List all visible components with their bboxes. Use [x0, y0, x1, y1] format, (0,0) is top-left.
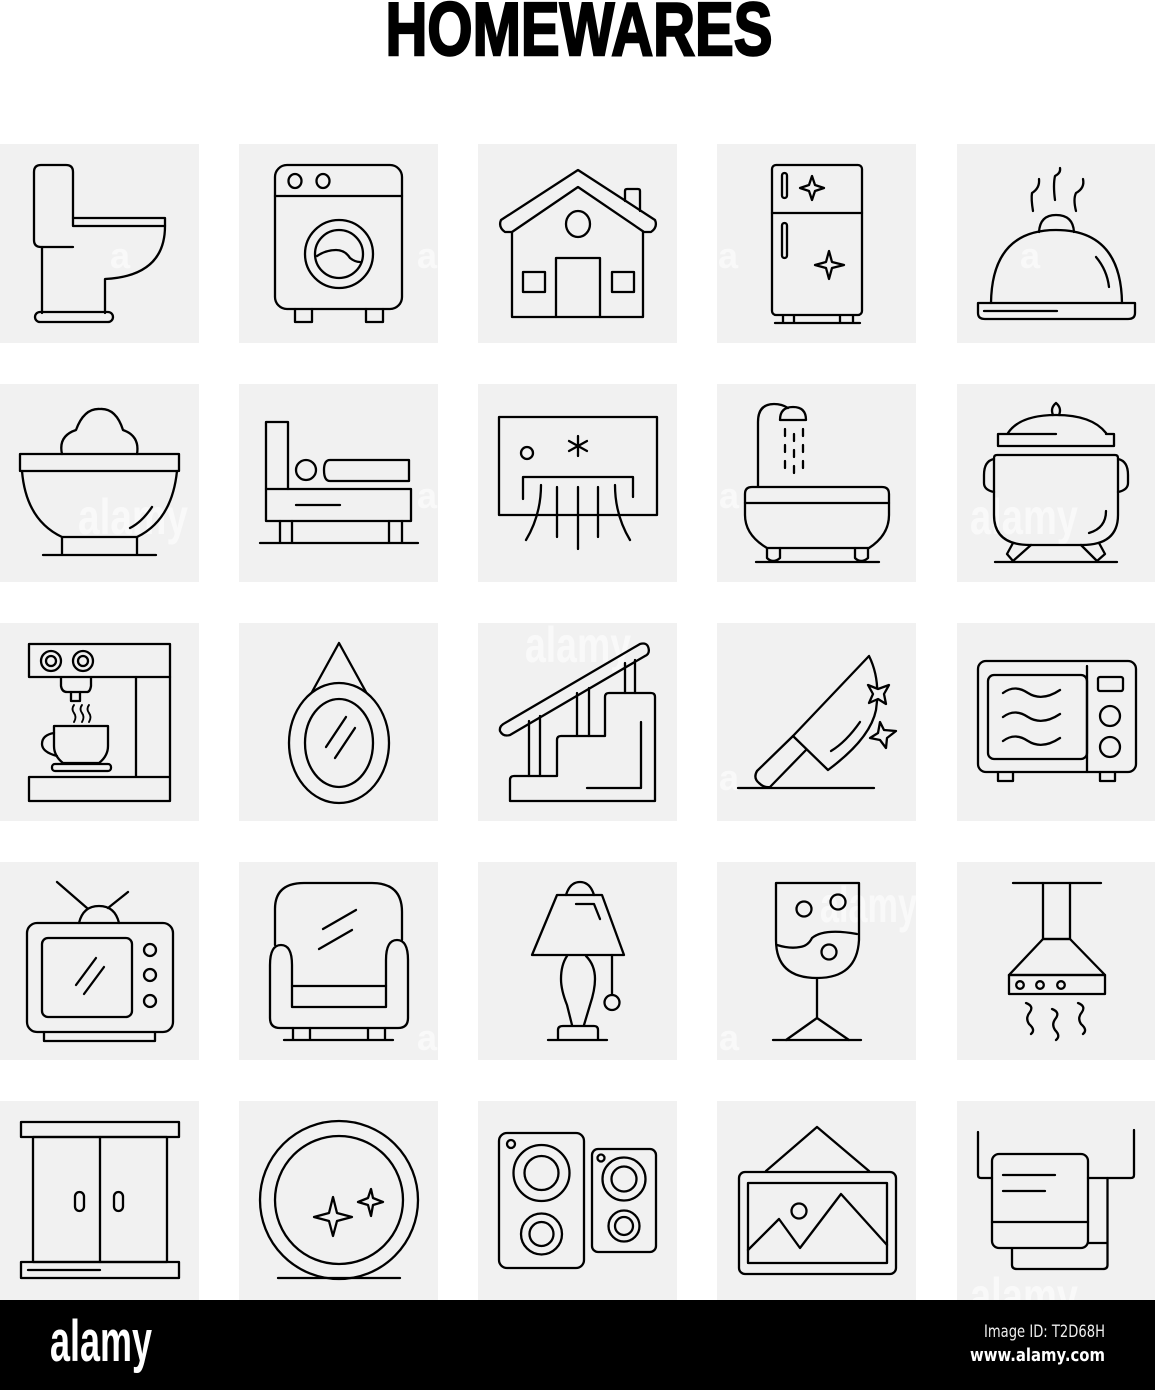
watermarks: alamy [970, 1268, 1078, 1324]
watermarks: alamy [78, 489, 188, 545]
icon: armchair [270, 883, 408, 1040]
icon: coffee machine [29, 644, 170, 801]
icon: table lamp [532, 882, 624, 1040]
footer image id: Image ID: T2D68H [984, 1322, 1105, 1342]
icon: hanging mirror [289, 643, 389, 803]
footer url: www.alamy.com [970, 1345, 1105, 1366]
icon: bathtub with shower [745, 404, 889, 562]
watermarks: a [719, 1017, 740, 1058]
watermarks: a [718, 235, 739, 276]
icon: refrigerator [772, 165, 862, 323]
icon: speakers [499, 1133, 656, 1268]
icon: knife with sparkles [738, 656, 896, 788]
watermarks: a [719, 757, 740, 798]
icon: round mirror [260, 1121, 418, 1279]
icon: bowl with food [20, 409, 179, 555]
watermarks [78, 235, 1078, 1324]
watermarks: a [1020, 235, 1041, 276]
icon: bed [260, 422, 418, 543]
icon: staircase [500, 644, 655, 801]
icon: wardrobe [21, 1122, 179, 1278]
watermarks: a [110, 235, 131, 276]
icon: kitchen hood [1009, 883, 1105, 1040]
watermarks: a [417, 235, 438, 276]
icon: air conditioner [499, 417, 657, 549]
icon: microwave [978, 661, 1136, 781]
watermarks: alamy [820, 877, 917, 933]
icon: food cloche [978, 168, 1135, 319]
icon: washing machine [275, 165, 402, 322]
footer bar [0, 1300, 1155, 1390]
icon: framed picture [739, 1127, 896, 1274]
icon: cooking pot [984, 403, 1128, 562]
icon: wine glass [773, 883, 861, 1040]
icon: towels on rack [978, 1130, 1134, 1269]
watermarks: alamy [525, 617, 631, 673]
watermarks: alamy [970, 489, 1078, 545]
footer logo: alamy [50, 1309, 152, 1374]
icon: toilet [34, 165, 165, 322]
watermarks: a [719, 475, 740, 516]
watermarks: a [417, 475, 438, 516]
icon: house [500, 170, 656, 317]
icon: television [27, 882, 173, 1041]
watermarks: a [417, 1017, 438, 1058]
